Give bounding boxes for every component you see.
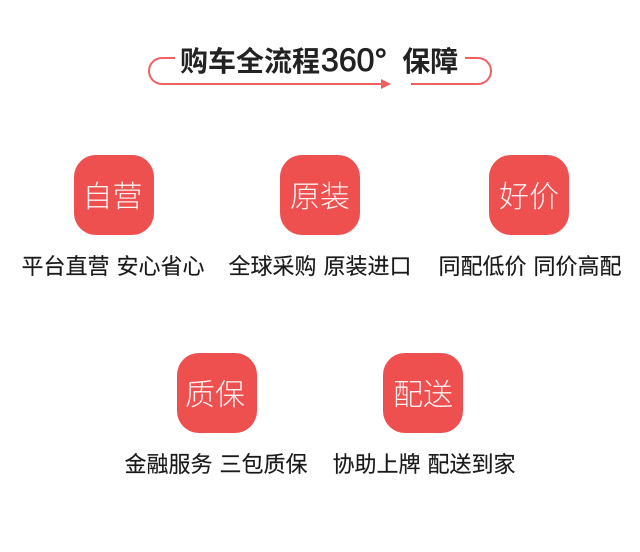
card: 自营	[21, 155, 205, 279]
card: 原装	[228, 155, 412, 279]
caption: 质保: 金融服务 三包质保	[124, 452, 308, 477]
icon: 质保: 质保	[185, 378, 245, 412]
icon: 自营	[74, 155, 154, 235]
title frame arrow	[148, 57, 492, 89]
icon: 好价	[489, 155, 569, 235]
title: 购车全流程360° 保障	[180, 42, 458, 78]
card: 配送	[332, 353, 516, 477]
icon: 配送: 配送	[393, 378, 453, 412]
icon: 好价: 好价	[499, 180, 559, 214]
caption: 自营: 平台直营 安心省心	[21, 254, 205, 279]
caption: 原装: 全球采购 原装进口	[228, 254, 412, 279]
icon: 原装	[280, 155, 360, 235]
caption: 好价: 同配低价 同价高配	[438, 254, 622, 279]
icon: 自营: 自营	[82, 180, 142, 214]
icon: 质保	[177, 353, 257, 433]
icon: 配送	[383, 353, 463, 433]
card: 质保	[124, 353, 308, 477]
card: 好价	[438, 155, 622, 279]
caption: 配送: 协助上牌 配送到家	[332, 452, 516, 477]
icon: 原装: 原装	[290, 180, 350, 214]
